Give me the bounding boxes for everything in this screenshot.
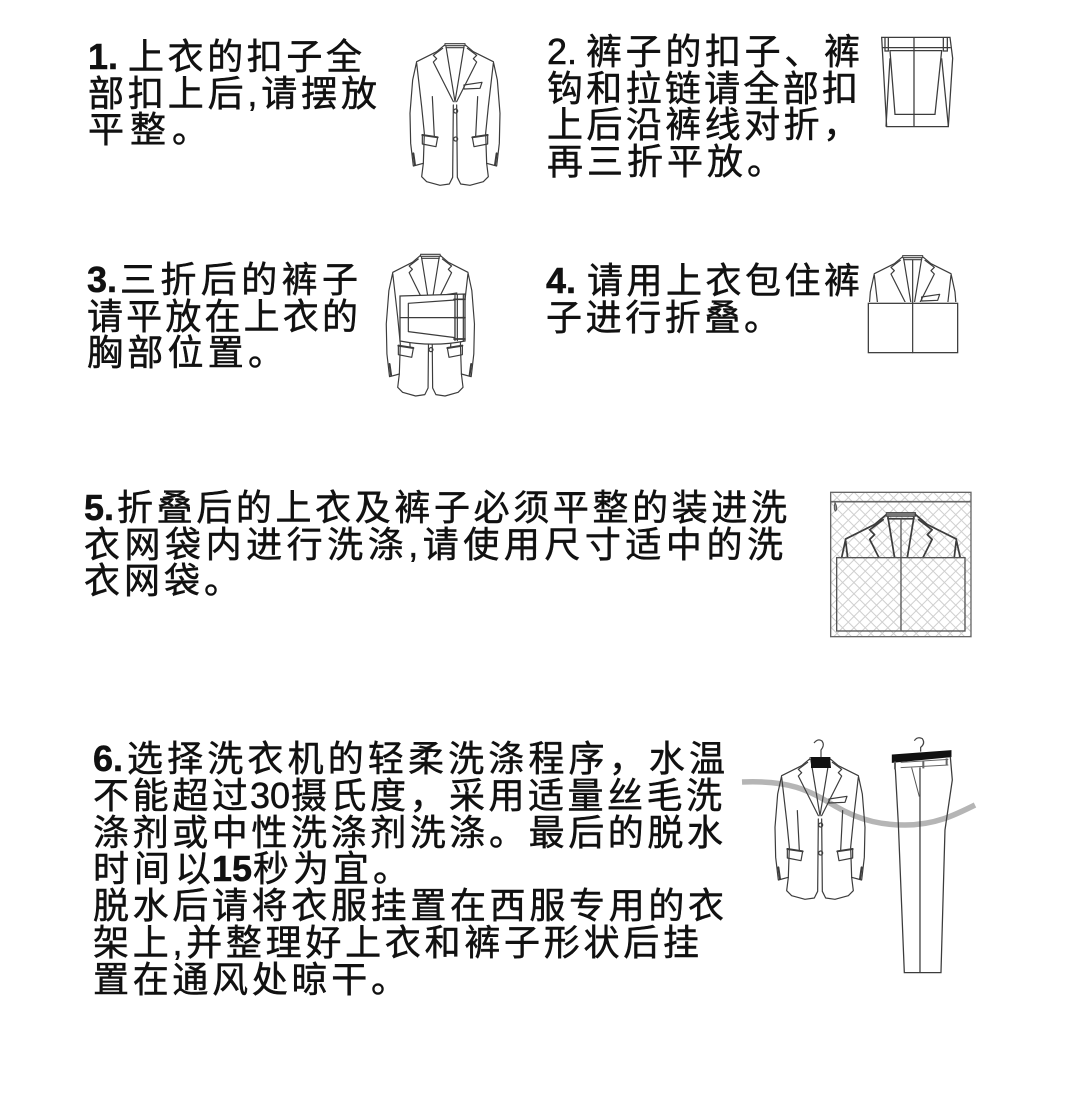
icon: trousers on hanger bbox=[892, 738, 952, 973]
step 3 text: 请平放在上衣的 bbox=[87, 296, 358, 337]
icon: garment in laundry net bbox=[831, 492, 971, 717]
icon: jacket wrapped around trousers bbox=[868, 256, 958, 397]
step 1 text: 1. bbox=[88, 36, 118, 77]
step 2 text: 再三折平放。 bbox=[547, 141, 783, 182]
step 4 text: 4. bbox=[546, 260, 576, 301]
icon: trousers on jacket bbox=[386, 254, 474, 396]
step 1 text: 上衣的扣子全 bbox=[128, 36, 362, 77]
step 6 text bbox=[93, 738, 725, 1000]
step 3 text: 胸部位置。 bbox=[87, 332, 284, 373]
step 2 text: 上后沿裤线对折， bbox=[547, 104, 859, 145]
step 6 text: 秒为宜。 bbox=[253, 848, 409, 889]
step 6 text: 6. bbox=[93, 738, 123, 779]
step 4 text: 请用上衣包住裤 bbox=[587, 260, 860, 301]
step 1 text bbox=[88, 36, 377, 150]
step 6 text: 脱水后请将衣服挂置在西服专用的衣 bbox=[93, 885, 724, 926]
step 5 text: 衣网袋内进行洗涤,请使用尺寸适中的洗 bbox=[84, 524, 783, 565]
step 6 text: 时间以 bbox=[93, 848, 211, 889]
step 5 text: 折叠后的上衣及裤子必须平整的装进洗 bbox=[117, 487, 787, 528]
icon: drying line bbox=[742, 782, 975, 825]
icon: jacket on hanger bbox=[775, 740, 865, 899]
step 6 text: 30 bbox=[250, 775, 290, 816]
step 3 text: 3. bbox=[87, 259, 117, 300]
step 5 text: 5. bbox=[84, 487, 114, 528]
step 5 text: 衣网袋。 bbox=[84, 560, 240, 601]
step 6 text: 15 bbox=[212, 848, 252, 889]
step 6 text: 选择洗衣机的轻柔洗涤程序，水温 bbox=[127, 738, 725, 779]
step 2 text: 钩和拉链请全部扣 bbox=[547, 68, 858, 109]
step 2 text bbox=[547, 31, 860, 182]
step 1 text: 平整。 bbox=[88, 109, 208, 150]
step 6 text: 摄氏度，采用适量丝毛洗 bbox=[291, 775, 722, 816]
step 4 text: 子进行折叠。 bbox=[546, 297, 780, 338]
step 6 text: 涤剂或中性洗涤剂洗涤。最后的脱水 bbox=[93, 812, 723, 853]
step 4 text bbox=[546, 260, 860, 338]
step 2 text: 裤子的扣子、裤 bbox=[586, 31, 860, 72]
step 2 text: 2. bbox=[547, 31, 577, 72]
step 6 text: 置在通风处晾干。 bbox=[93, 959, 407, 1000]
icon: buttoned jacket bbox=[410, 44, 500, 185]
step 1 text: 部扣上后,请摆放 bbox=[88, 73, 377, 114]
icon: folded trousers bbox=[882, 37, 953, 127]
step 3 text: 三折后的裤子 bbox=[120, 259, 358, 300]
step 6 text: 不能超过 bbox=[93, 775, 248, 816]
step 5 text bbox=[84, 487, 787, 601]
step 6 text: 架上,并整理好上衣和裤子形状后挂 bbox=[93, 922, 699, 963]
step 3 text bbox=[87, 259, 358, 373]
